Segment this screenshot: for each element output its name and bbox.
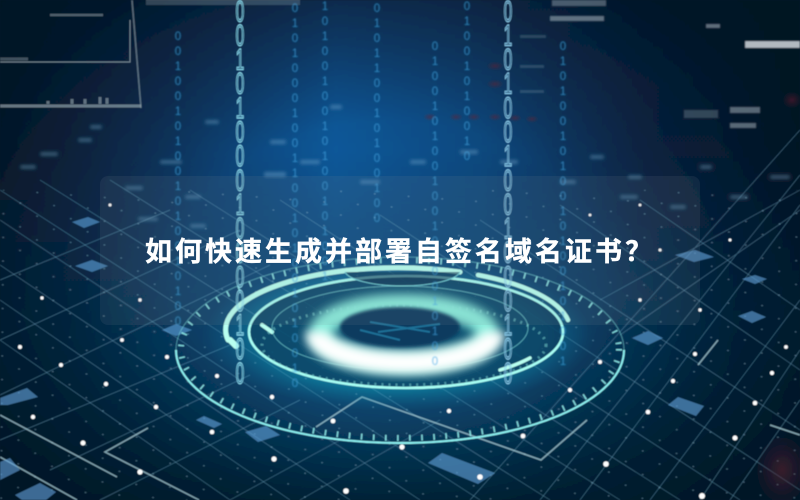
mid-distance light dashes [20, 105, 790, 228]
ring tick band [262, 305, 546, 385]
top-right HUD readouts [520, 0, 800, 128]
glowing core: white crescent [316, 332, 494, 363]
red indicator glows [423, 61, 800, 500]
thick upper arcs [226, 268, 568, 370]
title: 如何快速生成并部署自签名域名证书？ [145, 237, 655, 267]
binary columns: small: 00100101001010010100 [175, 31, 181, 328]
holographic ring platform [176, 257, 624, 443]
dark centre [340, 307, 460, 347]
ring halo [203, 259, 593, 411]
translucent title band [100, 176, 700, 325]
binary columns: small: 1010010010100101001 [322, 1, 328, 283]
glowing core: teal ring [320, 305, 488, 363]
binary columns: small: 0101001010010100101001 [560, 41, 566, 368]
binary column: bright right: 0101001001000100 [504, 0, 512, 391]
top-left HUD frame [0, 0, 300, 108]
bright circuit traces [0, 340, 800, 500]
centre circuitry [360, 322, 440, 340]
binary columns: small [175, 1, 566, 390]
binary columns: small: 01010001001100101001010010 [292, 3, 298, 390]
binary column: bright left: 0010100010000100 [236, 0, 244, 391]
blue data tiles [0, 217, 767, 500]
inner ring [249, 276, 563, 388]
binary columns: small: 010110010100100 [374, 3, 380, 225]
perspective dot grid [0, 190, 800, 500]
inner thin ring [272, 286, 528, 370]
small upper arc [345, 272, 460, 286]
binary columns: small: 01001010010 [464, 1, 470, 163]
white grid nodes [18, 204, 788, 499]
binary columns: small: 0100101001001010010100 [432, 41, 438, 368]
perspective grid lines [0, 130, 800, 500]
outer tick ring [176, 257, 624, 443]
